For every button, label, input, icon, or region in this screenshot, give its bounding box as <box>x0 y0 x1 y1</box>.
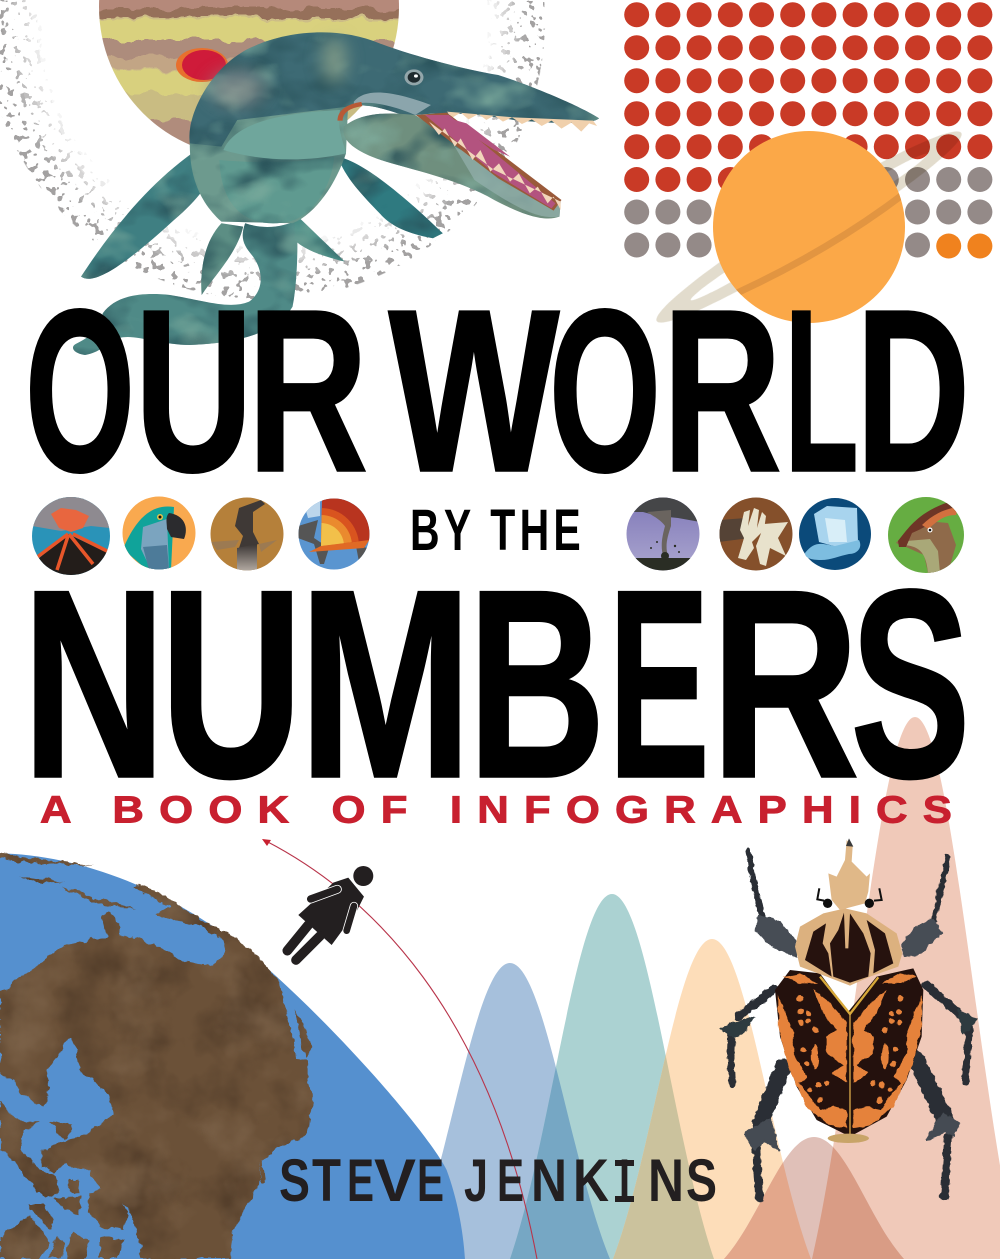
author: N <box>648 1147 684 1214</box>
title: OUR WORLD: W <box>389 262 559 520</box>
back fins <box>295 213 345 262</box>
back and upper head <box>189 32 599 147</box>
eye <box>404 69 423 85</box>
back patches <box>210 37 346 108</box>
title: NUMBERS: B <box>468 534 606 834</box>
land masses <box>0 854 313 1259</box>
speckled gray ring <box>0 0 620 339</box>
legs <box>720 851 977 1198</box>
author: S <box>279 1147 310 1214</box>
right flipper <box>338 157 443 238</box>
title: OUR WORLD: O <box>549 262 661 520</box>
mouth and throat <box>416 113 561 211</box>
eyes and hooks <box>817 888 882 908</box>
title: OUR WORLD: R <box>662 262 782 520</box>
elytra <box>775 968 923 1137</box>
author: K <box>573 1147 609 1214</box>
icon: earthquake crack <box>210 497 284 571</box>
planet: Jupiter with red spot <box>99 0 399 145</box>
icon: triceratops fossil <box>719 497 793 571</box>
side of body <box>190 107 348 223</box>
author: S <box>686 1147 717 1214</box>
jaw corner <box>340 104 362 121</box>
ocean <box>0 853 465 1259</box>
title: NUMBERS: U <box>160 534 303 834</box>
icon: parrot <box>122 496 196 570</box>
title: OUR WORLD: R <box>247 262 368 520</box>
title: NUMBERS: N <box>22 534 166 834</box>
title: OUR WORLD: O <box>25 262 135 520</box>
lower teeth <box>429 122 561 210</box>
title: NUMBERS <box>22 534 970 834</box>
person icon standing on globe <box>287 866 373 960</box>
icon: volcano <box>32 497 110 575</box>
belly <box>223 110 346 159</box>
elytra pattern <box>778 973 922 1128</box>
icon: parasaurolophus <box>888 497 964 573</box>
title: NUMBERS: E <box>608 534 710 834</box>
goliath beetle <box>720 838 977 1198</box>
author: T <box>312 1147 341 1214</box>
subtitle: A BOOK OF INFOGRAPHICS <box>40 788 952 831</box>
bar of dots: red, gray and orange <box>624 2 992 258</box>
author: I <box>619 1147 630 1214</box>
head and horn <box>828 840 870 910</box>
title: OUR WORLD: U <box>135 262 253 520</box>
author <box>279 1147 717 1214</box>
author: V <box>374 1147 416 1214</box>
title: NUMBERS: R <box>710 534 860 834</box>
lower body <box>219 157 334 223</box>
tail <box>73 220 297 355</box>
title: NUMBERS: M <box>298 534 472 834</box>
author: E <box>497 1147 524 1214</box>
lower jaw <box>343 114 561 218</box>
title: BY THE: BY THE <box>410 498 585 563</box>
left flipper <box>81 135 221 279</box>
icon: tornado <box>626 497 700 572</box>
pronotum <box>795 908 902 986</box>
red spot <box>176 48 228 82</box>
icon: earth cross section <box>298 498 370 570</box>
globe <box>0 853 465 1259</box>
red arc arrow <box>262 839 537 1259</box>
title: OUR WORLD: L <box>784 262 858 520</box>
title: OUR WORLD <box>25 262 970 520</box>
upper teeth <box>447 112 597 132</box>
author: N <box>531 1147 567 1214</box>
author: J <box>464 1147 488 1214</box>
mosasaur <box>73 32 599 355</box>
author: E <box>347 1147 374 1214</box>
author: E <box>417 1147 444 1214</box>
icon: ice cube <box>799 498 871 570</box>
jaw highlight <box>354 92 431 115</box>
pastel humps chart <box>410 717 1000 1259</box>
planet: Saturn with rings <box>646 116 972 338</box>
